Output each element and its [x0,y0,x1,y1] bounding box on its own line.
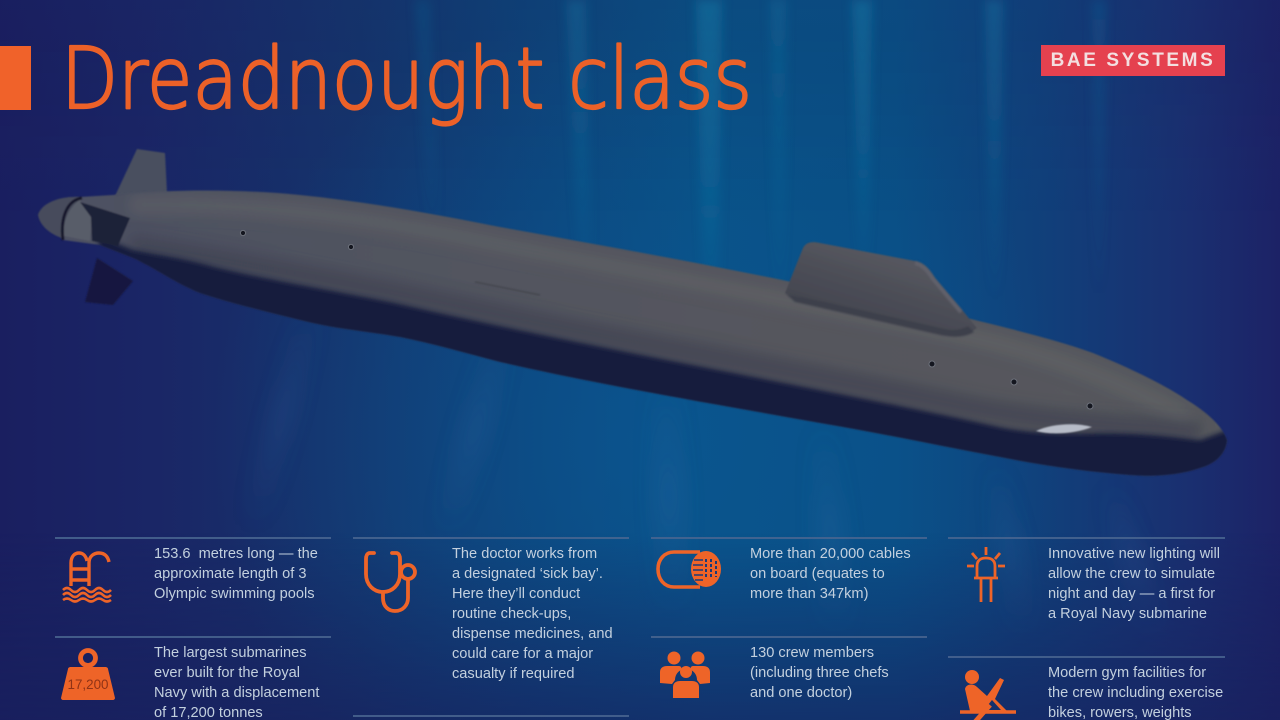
text: length: Olympic swimming pools [154,586,315,602]
text: lighting: night and day — a first for [1048,586,1215,602]
info panel: column 2 [353,537,629,717]
propulsor ring [62,198,82,240]
text: sick bay: could care for a major [452,646,593,662]
text: crew: (including three chefs [750,665,889,681]
text: length: approximate length of 3 [154,566,307,582]
icon: weight: 17,200 [68,677,108,692]
text: sick bay: routine check-ups, [452,606,571,622]
bow light reflection [1036,424,1092,433]
lower rudder fin [85,258,133,305]
text: cables: on board (equates to [750,566,885,582]
text: sick bay: casualty if required [452,666,574,682]
info panel: column 4 [948,537,1225,720]
text: crew: 130 crew members [750,645,874,661]
submarine illustration [38,148,1228,476]
text: crew: and one doctor) [750,685,852,701]
title accent block [0,46,31,110]
text: lighting [1048,546,1220,622]
text: cables: more than 347km) [750,586,868,602]
sail ridge highlight [915,263,961,312]
hull ports [240,230,1093,409]
text: sick bay [452,546,613,682]
icon: swimming pool [62,551,112,603]
icon: weight [61,648,115,700]
text: length: 153.6 metres long — the [154,546,318,562]
text: sick bay: The doctor works from [452,546,597,562]
text: length [154,546,318,602]
text: cables: More than 20,000 cables [750,546,911,562]
text: cables [750,546,911,602]
hull panel line [475,282,540,295]
text: crew [750,645,889,701]
text: lighting: Innovative new lighting will [1048,546,1220,562]
icon: rower [960,670,1016,720]
title: Dreadnought class [61,30,752,129]
text: gym: Modern gym facilities for [1048,665,1206,681]
text: lighting: allow the crew to simulate [1048,566,1215,582]
icon: LED light [967,547,1005,602]
text: sick bay: dispense medicines, and [452,626,613,642]
upper rudder fin [115,149,167,196]
text: gym: the crew including exercise [1048,685,1223,701]
hull [38,190,1232,490]
stern plane [80,202,130,246]
text: displacement: Navy with a displacement [154,685,319,701]
text: displacement [154,645,320,720]
sail [785,242,977,335]
sail base shadow [785,293,974,337]
icon: stethoscope [364,551,417,613]
text: lighting: a Royal Navy submarine [1048,606,1207,622]
text: gym [1048,665,1223,720]
icon: cable [656,550,721,589]
text: displacement: The largest submarines [154,645,306,661]
hull top highlight [130,205,1190,420]
logo: BAE Systems: BAE SYSTEMS [1051,50,1215,71]
logo: BAE Systems [1041,45,1225,76]
tail cone [38,197,80,238]
hull lower shading [130,245,1200,432]
info panel: column 1 [55,537,331,720]
text: displacement: ever built for the Royal [154,665,300,681]
text: sick bay: a designated ‘sick bay’. [452,566,603,582]
info panel: column 3 [651,537,927,701]
icon: crew [660,652,710,698]
hull underside shadow [96,242,1228,476]
propulsor shroud [64,200,92,241]
text: sick bay: Here they’ll conduct [452,586,580,602]
